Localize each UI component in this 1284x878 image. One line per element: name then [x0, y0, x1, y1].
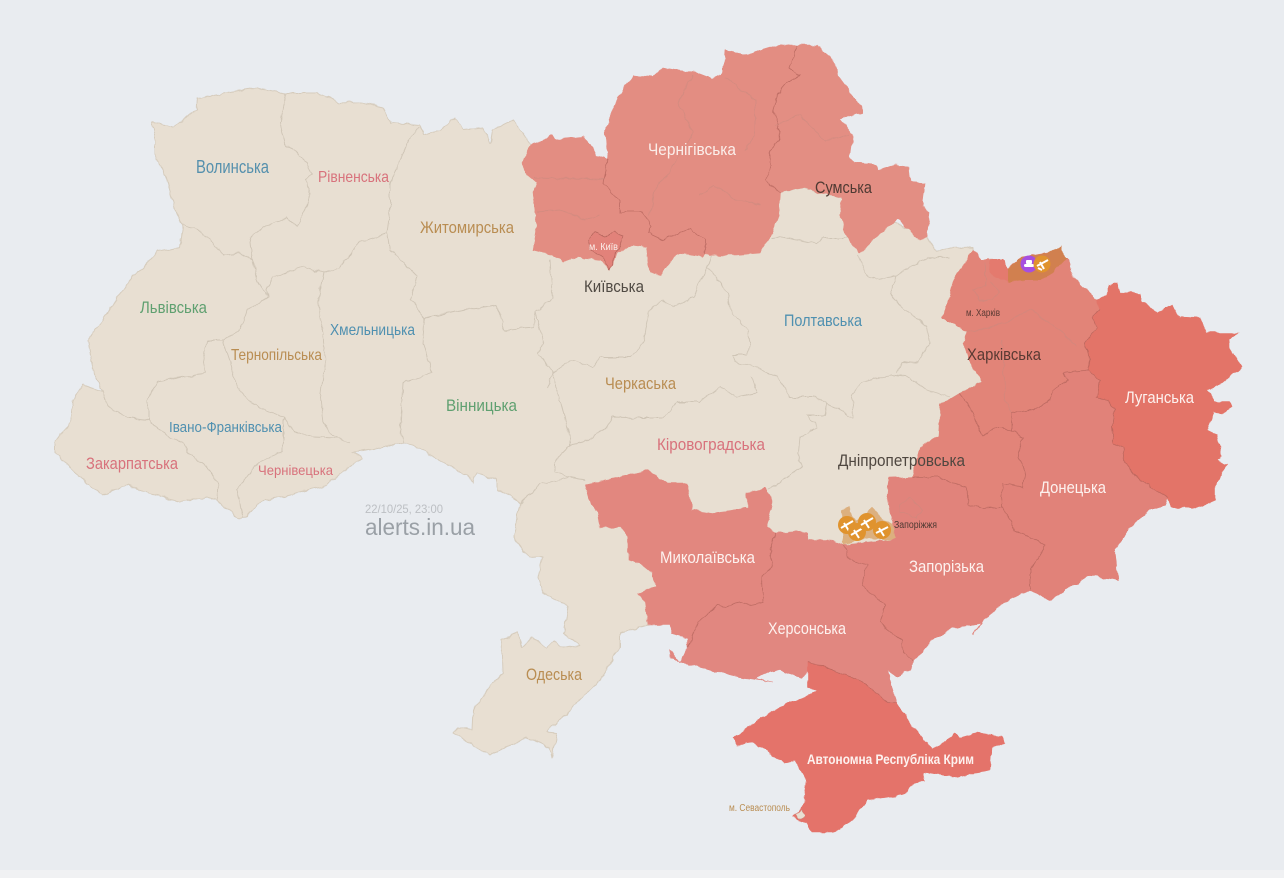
label: Zakarpattia: Закарпатська — [86, 454, 178, 473]
region: Zaporizhzhia oblast — [843, 477, 1045, 662]
region borders: north — [535, 45, 850, 253]
icons: artillery cluster — [838, 513, 891, 541]
label: Kharkiv city: м. Харків — [966, 308, 1000, 319]
label: Dnipropetrovsk: Дніпропетровська — [838, 451, 965, 470]
region: Sumy oblast — [765, 45, 930, 253]
label: Kherson: Херсонська — [768, 619, 846, 638]
label: Lviv: Львівська — [140, 298, 207, 317]
active zone: Zaporizhzhia front strip — [842, 507, 896, 545]
label: Ivano-Frankivsk: Івано-Франківська — [169, 419, 283, 436]
label: Poltava: Полтавська — [784, 311, 862, 330]
region: Luhansk oblast — [1085, 283, 1242, 508]
region group: no-alert oblasts — [55, 88, 982, 758]
label: Mykolaiv: Миколаївська — [660, 548, 755, 567]
label: Volyn: Волинська — [196, 157, 270, 177]
timestamp: 22/10/25, 23:00 — [365, 502, 443, 516]
icon: artillery — [1034, 256, 1050, 272]
label: Ternopil: Тернопільська — [231, 347, 322, 364]
region: Kyiv oblast alert part — [523, 135, 705, 275]
watermark: alerts.in.ua: alerts.in.ua — [365, 514, 475, 540]
label: Vinnytsia: Вінницька — [446, 396, 517, 415]
region: Kyiv city — [588, 232, 623, 270]
region: Kherson oblast — [670, 532, 913, 703]
label: Chernihiv: Чернігівська — [648, 140, 736, 159]
label: Crimea: Автономна Республіка Крим — [807, 751, 974, 767]
region: Crimea — [733, 662, 1005, 832]
icon: tank — [1020, 256, 1038, 272]
label: Kyiv city: м. Київ — [589, 242, 618, 253]
label: Sumy: Сумська — [815, 178, 872, 197]
label: Donetsk: Донецька — [1040, 478, 1106, 497]
label: Rivne: Рівненська — [318, 169, 389, 186]
region borders: south and east — [688, 262, 1167, 703]
region: Chernihiv oblast — [603, 45, 800, 255]
oblast borders: west and centre — [103, 93, 950, 517]
region: Dnipropetrovsk oblast alert part — [912, 393, 1025, 508]
label: Luhansk: Луганська — [1125, 388, 1194, 407]
label: Zaporizhzhia city: Запоріжжя — [894, 520, 937, 531]
region: Sevastopol — [795, 810, 805, 819]
label: Kyiv oblast: Київська — [584, 277, 644, 296]
label: Kirovohrad: Кіровоградська — [657, 435, 765, 454]
label: Khmelnytskyi: Хмельницька — [330, 322, 415, 339]
region: Kharkiv oblast — [943, 250, 1100, 437]
active zone: Kharkiv border strip — [989, 245, 1067, 282]
region: Donetsk oblast — [1002, 370, 1167, 600]
label: Cherkasy: Черкаська — [605, 374, 676, 393]
label: Zaporizhzhia oblast: Запорізька — [909, 557, 984, 576]
label: Kharkiv oblast: Харківська — [967, 345, 1041, 364]
label: Odesa: Одеська — [526, 665, 582, 684]
label: Sevastopol: м. Севастополь — [729, 803, 790, 814]
region: Mykolaiv oblast — [585, 470, 775, 648]
label: Zhytomyr: Житомирська — [420, 218, 514, 237]
label: Chernivtsi: Чернівецька — [258, 462, 333, 478]
